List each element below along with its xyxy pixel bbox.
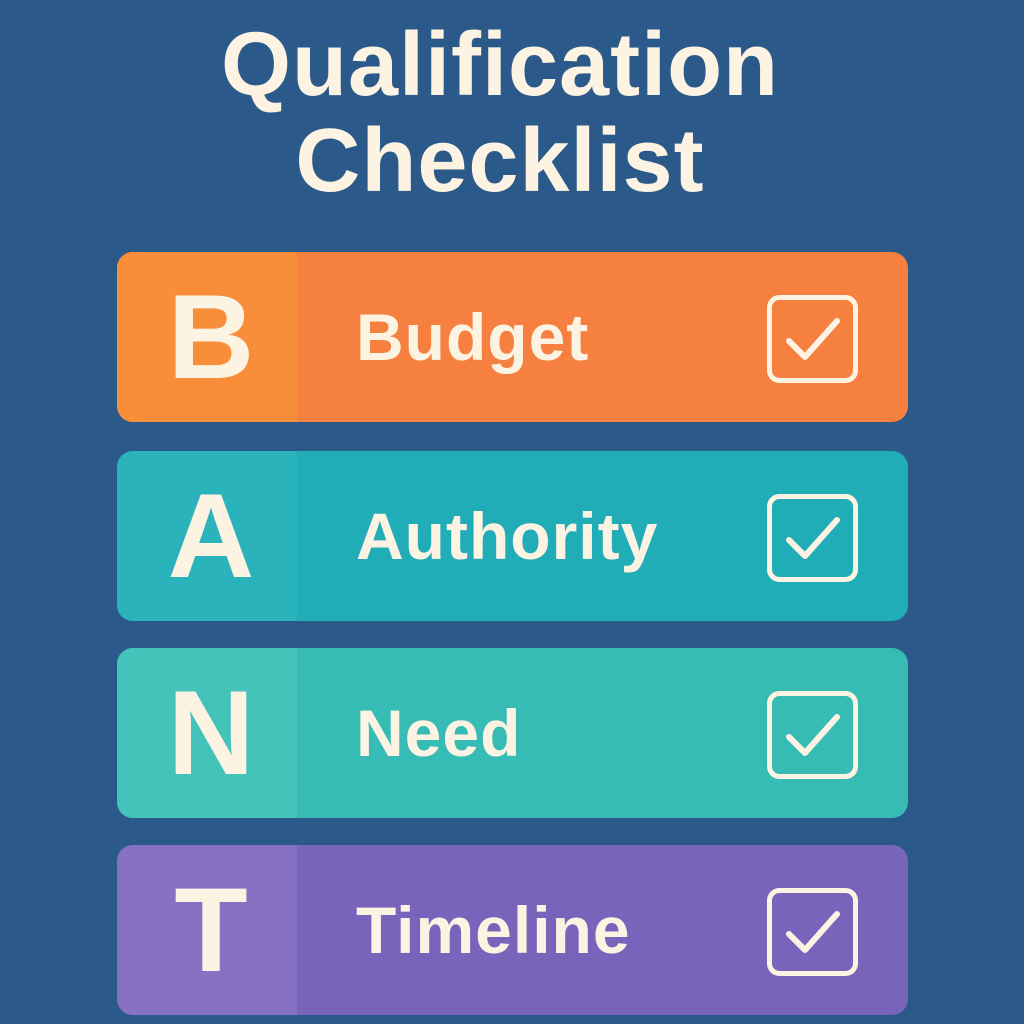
- label need: Need: [356, 696, 521, 770]
- letter B: [117, 252, 297, 422]
- letter A: [117, 451, 297, 621]
- panel: need: [117, 648, 908, 818]
- label authority: Authority: [356, 499, 658, 573]
- letter A: A: [168, 469, 254, 603]
- icon: checkbox: [767, 691, 858, 779]
- icon: checkbox: [767, 888, 858, 976]
- panel: budget: [117, 252, 908, 422]
- panel: timeline: [117, 845, 908, 1015]
- icon: checkbox: [767, 494, 858, 582]
- title: Qualification: [221, 15, 779, 115]
- letter B: B: [168, 270, 254, 404]
- title: Checklist: [295, 111, 705, 211]
- label timeline: Timeline: [356, 893, 631, 967]
- panel: authority: [117, 451, 908, 621]
- title: [221, 15, 779, 211]
- icon: checkbox: [767, 295, 858, 383]
- letter T: T: [174, 863, 248, 997]
- label budget: Budget: [356, 300, 589, 374]
- letter N: [117, 648, 297, 818]
- letter T: [117, 845, 297, 1015]
- letter N: N: [168, 666, 254, 800]
